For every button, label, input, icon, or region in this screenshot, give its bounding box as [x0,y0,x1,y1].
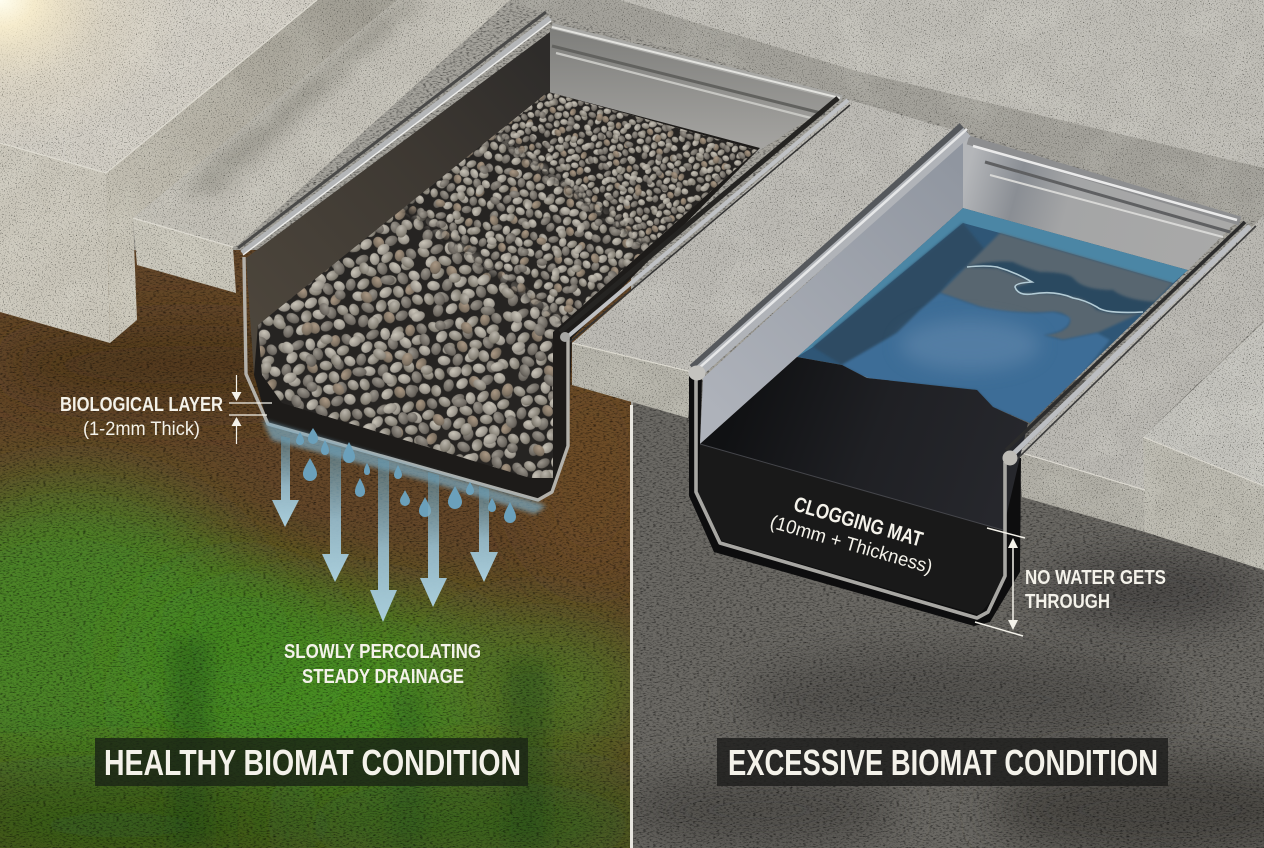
label: line one: NO WATER GETS [1025,567,1166,589]
water: grey reflection [940,233,1173,340]
back wall stripes [552,26,842,119]
concrete: lower left step [133,0,510,293]
label: clogging mat heading: CLOGGING MAT [791,493,925,552]
water: dark squiggle [966,262,1157,314]
concrete edge highlights [0,0,1264,490]
marker: thickness ticks and arrows [229,375,272,444]
arrow: drainage 4 [420,472,447,607]
arrow: drainage 5 [470,486,498,582]
back wall stripes [968,140,1240,237]
liner profile [696,378,1005,618]
left wall [246,32,550,375]
panel: healthy soil background [0,250,670,848]
right rail [1002,222,1256,466]
concrete: upper left step [0,0,397,343]
left rail [238,12,551,255]
divider between conditions [630,405,633,848]
line one: SLOWLY PERCOLATING [284,641,481,663]
liner outer black [689,376,1021,626]
callout: slow percolation label [284,641,481,688]
mat top surface [700,357,1028,530]
panel: excessive trench with clogging mat [688,128,1256,626]
arrow: drainage 3 [370,458,397,622]
water: dark left reflection [813,223,985,365]
end cap [560,332,570,342]
water: light blue edge band [797,208,1188,357]
water drops [296,428,516,523]
mat front face [698,444,1003,615]
arrow: drainage 1 [272,436,299,527]
water: blue pool [842,293,1110,423]
label: biological layer thickness: (1-2mm Thick) [83,419,200,440]
label: clogging mat thickness: (10mm + Thickness) [767,512,935,578]
line two: STEADY DRAINAGE [302,666,464,688]
glow: sunlight top left [0,0,240,190]
callout: biological layer [60,375,272,444]
callout: clogging mat label [767,488,942,578]
arrow: drainage 2 [322,445,349,582]
label: biological layer heading: BIOLOGICAL LAYER [60,394,223,416]
concrete: right upper step [1143,322,1264,570]
panel: healthy trench with gravel [238,12,850,500]
biological layer seepage [262,420,546,523]
concrete: right lower slab [1018,215,1264,532]
callout: no water gets through [975,528,1166,636]
right rail [560,98,850,342]
concrete: far right back slab [500,0,1264,222]
label: line two: THROUGH [1025,591,1110,613]
water surface [797,208,1188,423]
back wall [548,28,838,152]
dimension arrow [975,528,1025,636]
title: healthy biomat condition [95,738,528,786]
trench dark floor and liner body [254,92,760,500]
blue film under the liner [262,420,546,514]
mat top edge [700,444,1003,530]
gravel fill [258,92,757,478]
left wall [700,140,963,444]
left rail [688,128,967,380]
title: healthy biomat condition: HEALTHY BIOMAT CONDITION [104,742,521,783]
panel: concrete slabs [0,0,1264,570]
concrete: middle slab [572,100,960,418]
back wall [963,135,1240,270]
liner profile [244,257,568,500]
panel: excessive soil background [620,380,1264,848]
